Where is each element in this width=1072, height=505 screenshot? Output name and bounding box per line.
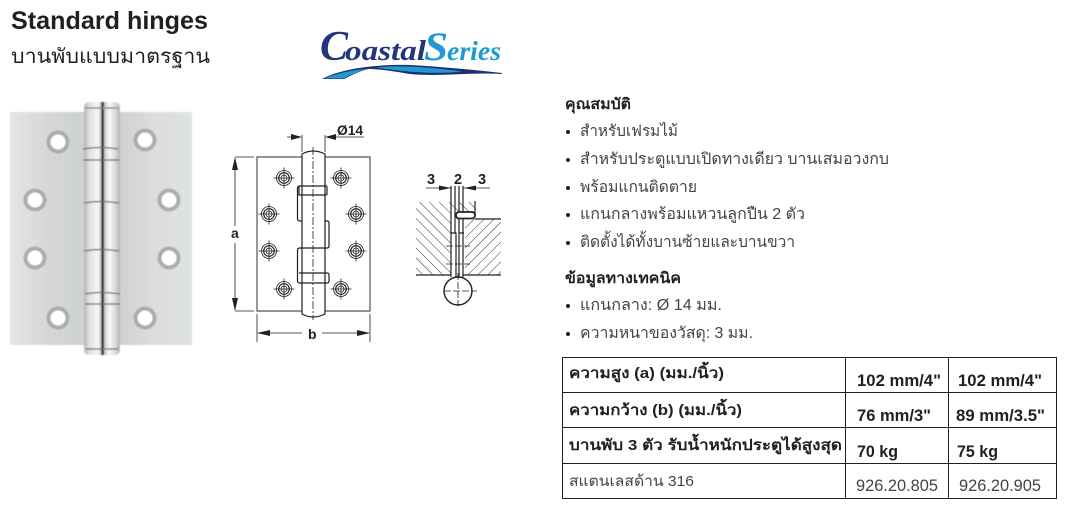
technical data list: ความหนาของวัสดุ: 3 มม. bbox=[580, 325, 753, 343]
row: width: ความกว้าง (b) (มม./นิ้ว) bbox=[569, 398, 742, 419]
feature list: พร้อมแกนติดตาย bbox=[580, 179, 697, 196]
dimension: pin diameter bbox=[287, 122, 364, 140]
hinge cross-section drawing bbox=[416, 172, 501, 306]
dimensions: 3, 2, 3: 3 bbox=[478, 172, 486, 188]
logo: Coastal Series: oastal bbox=[345, 35, 427, 67]
panel: features bbox=[565, 95, 889, 343]
feature list: สำหรับเฟรมไม้ bbox=[580, 122, 678, 140]
logo: Coastal Series: eries bbox=[447, 36, 501, 66]
row: maximum door weight bbox=[569, 433, 998, 461]
dimensions: 3, 2, 3 bbox=[426, 172, 490, 190]
row: article numbers: 926.20.905 bbox=[959, 477, 1041, 495]
hinge product photo bbox=[10, 102, 192, 355]
row: maximum door weight: 75 kg bbox=[957, 443, 998, 461]
row: height bbox=[569, 361, 1042, 390]
row: height: ความสูง (a) (มม./นิ้ว) bbox=[569, 361, 724, 383]
row: height: 102 mm/4" bbox=[857, 372, 941, 390]
row: maximum door weight: 70 kg bbox=[857, 443, 898, 461]
dimension: height a: a bbox=[231, 225, 239, 241]
specification table bbox=[562, 357, 1057, 499]
row: width: 89 mm/3.5" bbox=[956, 407, 1045, 425]
subtitle in Thai: บานพับแบบมาตรฐาน bbox=[11, 46, 210, 68]
dimension: pin diameter: Ø14 bbox=[337, 122, 363, 138]
dimension: height a bbox=[231, 157, 239, 311]
feature list: ติดตั้งได้ทั้งบานซ้ายและบานขวา bbox=[580, 230, 795, 251]
row: width: 76 mm/3" bbox=[857, 407, 931, 425]
dimensions: 3, 2, 3: 3 bbox=[427, 172, 435, 188]
feature list: แกนกลางพร้อมแหวนลูกปืน 2 ตัว bbox=[580, 205, 805, 224]
row: article numbers bbox=[569, 473, 1041, 495]
row: height: 102 mm/4" bbox=[958, 372, 1042, 390]
hinge technical drawing bbox=[231, 122, 370, 342]
feature list: สำหรับประตูแบบเปิดทางเดียว บานเสมอวงกบ bbox=[580, 151, 889, 169]
row: maximum door weight: บานพับ 3 ตัว รับน้ำหนักประตูได้สูงสุด bbox=[569, 433, 842, 455]
heading: features: คุณสมบัติ bbox=[565, 95, 631, 114]
row: article numbers: สแตนเลสด้าน 316 bbox=[569, 473, 694, 490]
dimensions: 3, 2, 3: 2 bbox=[454, 172, 462, 188]
logo: Coastal Series bbox=[320, 24, 502, 79]
dimension: width b: b bbox=[308, 326, 317, 342]
logo: Coastal Series: C bbox=[320, 24, 349, 70]
technical data list: แกนกลาง: Ø 14 มม. bbox=[580, 297, 722, 314]
title: Standard hinges bbox=[11, 7, 208, 35]
feature list bbox=[566, 122, 889, 251]
heading: technical data: ข้อมูลทางเทคนิค bbox=[565, 269, 681, 288]
row: article numbers: 926.20.805 bbox=[856, 477, 938, 495]
technical data list bbox=[566, 297, 753, 343]
row: width bbox=[569, 398, 1045, 425]
dimension: width b bbox=[257, 326, 370, 342]
logo: Coastal Series: S bbox=[424, 24, 448, 69]
